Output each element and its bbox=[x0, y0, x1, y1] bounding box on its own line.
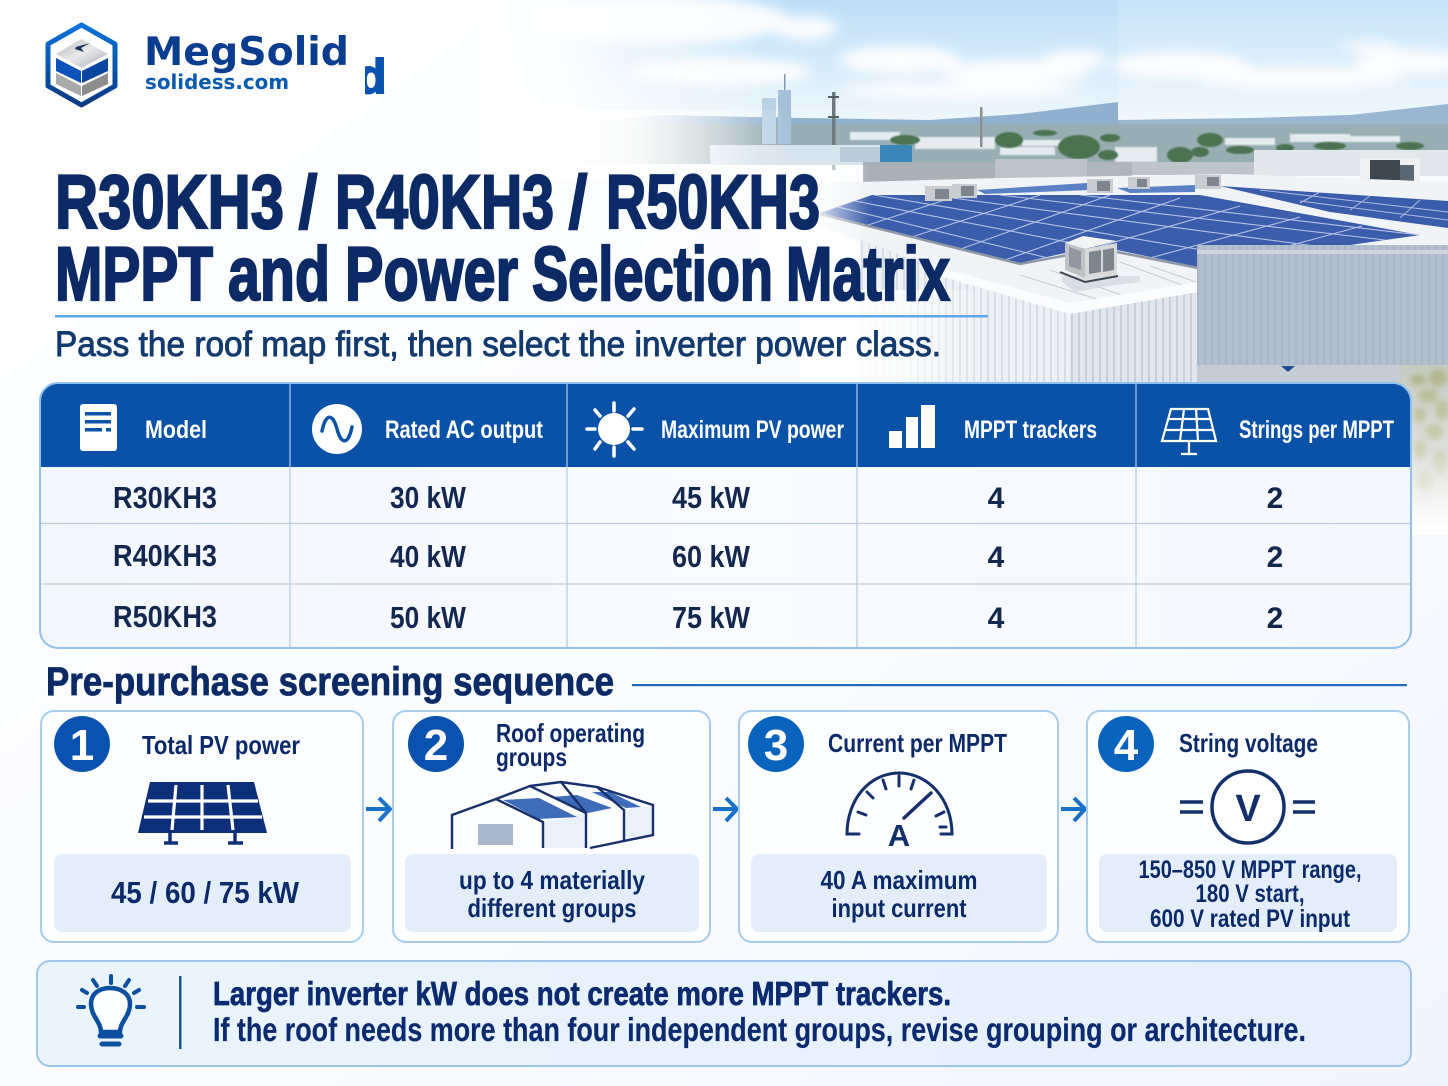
row: R40KH3: 4 bbox=[988, 541, 1005, 574]
card heading bbox=[496, 718, 645, 772]
row: R30KH3: 4 bbox=[988, 482, 1005, 515]
clipped letter remnant: d bbox=[357, 51, 386, 104]
roof units bbox=[925, 175, 1221, 201]
row: R40KH3: R40KH3 bbox=[113, 538, 217, 573]
icon: voltmeter: V bbox=[1235, 788, 1261, 830]
card heading: String voltage bbox=[1179, 728, 1318, 758]
header: Maximum PV power: Maximum PV power bbox=[661, 416, 844, 444]
row: R50KH3: 4 bbox=[988, 602, 1005, 635]
step badge 1 bbox=[54, 716, 110, 772]
header: Rated AC output: Rated AC output bbox=[385, 416, 544, 444]
specification table bbox=[40, 383, 1411, 648]
icon: ammeter gauge: A bbox=[888, 818, 910, 853]
value panel bbox=[54, 854, 351, 932]
card 4: string voltage bbox=[1087, 711, 1409, 942]
background photo: rooftop solar site bbox=[480, 0, 1448, 535]
value panel: 150–850 V MPPT range, bbox=[1138, 856, 1362, 884]
icon: light bulb bbox=[78, 976, 144, 1044]
value panel: 180 V start, bbox=[1196, 880, 1304, 908]
value panel bbox=[751, 854, 1047, 932]
header: MPPT trackers: MPPT trackers bbox=[964, 416, 1097, 444]
icon: voltmeter bbox=[1180, 771, 1315, 843]
row: R30KH3: 2 bbox=[1267, 482, 1283, 515]
row: R50KH3: 2 bbox=[1267, 602, 1283, 635]
row: R30KH3: R30KH3 bbox=[113, 480, 217, 515]
step badge 1: 1 bbox=[70, 721, 94, 770]
callout bbox=[37, 961, 1411, 1066]
card 2: roof operating groups bbox=[393, 711, 710, 942]
row: R30KH3: 30 kW bbox=[390, 480, 467, 515]
icon: AC sine bbox=[312, 404, 362, 454]
title: / bbox=[298, 160, 318, 245]
step badge 4: 4 bbox=[1114, 721, 1139, 770]
value panel: 40 A maximum bbox=[820, 865, 978, 895]
callout text: Larger inverter kW does not create more MPPT trackers. bbox=[213, 975, 951, 1012]
header: Model: Model bbox=[145, 416, 207, 444]
title: R40KH3 bbox=[335, 160, 554, 245]
row: R50KH3: R50KH3 bbox=[113, 599, 217, 634]
row: R40KH3: 2 bbox=[1267, 541, 1283, 574]
icon: hexagon cube mark bbox=[48, 25, 115, 105]
icon: sun bbox=[587, 403, 642, 456]
card heading: Current per MPPT bbox=[828, 728, 1007, 758]
title rule bbox=[55, 315, 988, 318]
website: solidess.com bbox=[145, 70, 289, 94]
arrow 3 bbox=[1061, 798, 1085, 821]
icon: solar panel bbox=[1162, 409, 1216, 454]
title: Matrix bbox=[786, 232, 950, 317]
icon: roof groups bbox=[452, 782, 653, 849]
row: R40KH3: 40 kW bbox=[390, 539, 467, 574]
value panel: input current bbox=[832, 893, 967, 923]
divider bbox=[179, 976, 182, 1049]
table header bbox=[40, 383, 1411, 467]
value panel: 600 V rated PV input bbox=[1150, 905, 1351, 933]
card heading: Total PV power bbox=[142, 730, 300, 760]
card 3: current per MPPT bbox=[739, 711, 1058, 942]
trees at right edge bbox=[1400, 365, 1448, 535]
step badge 3: 3 bbox=[764, 721, 788, 770]
section heading: Pre-purchase screening sequence bbox=[46, 660, 614, 704]
row: R50KH3 bbox=[113, 599, 1283, 635]
value panel: up to 4 materially bbox=[459, 865, 645, 895]
brand name: MegSolid bbox=[144, 30, 349, 75]
row: R40KH3: 60 kW bbox=[672, 539, 751, 574]
row: R40KH3 bbox=[113, 538, 1283, 574]
icon: solar panel bbox=[138, 782, 267, 843]
title: Power bbox=[345, 232, 518, 317]
arrow 2 bbox=[713, 798, 737, 821]
row: R50KH3: 50 kW bbox=[390, 600, 467, 635]
header: Strings per MPPT: Strings per MPPT bbox=[1239, 416, 1394, 444]
value panel bbox=[405, 854, 699, 932]
subtitle: Pass the roof map first, then select the inverter power class. bbox=[55, 325, 941, 364]
title: and bbox=[228, 232, 330, 317]
card heading: Roof operating bbox=[496, 718, 645, 748]
arrow 1 bbox=[366, 798, 390, 821]
step badge 2 bbox=[408, 716, 464, 772]
title: MPPT bbox=[55, 232, 213, 317]
card 1: total PV power bbox=[41, 711, 363, 942]
value panel: 45 / 60 / 75 kW bbox=[111, 875, 300, 910]
value panel: different groups bbox=[468, 893, 636, 923]
title bbox=[55, 160, 950, 317]
title: Selection bbox=[532, 232, 773, 317]
title: / bbox=[568, 160, 588, 245]
row: R30KH3 bbox=[113, 480, 1283, 515]
step badge 3 bbox=[748, 716, 804, 772]
large roof unit bbox=[1060, 236, 1140, 292]
card heading: groups bbox=[496, 742, 567, 772]
callout text bbox=[213, 975, 1306, 1048]
icon: bars bbox=[889, 405, 935, 448]
row: R50KH3: 75 kW bbox=[672, 600, 751, 635]
step badge 4 bbox=[1098, 716, 1154, 772]
row: R30KH3: 45 kW bbox=[672, 480, 751, 515]
logo bbox=[48, 25, 386, 105]
title: R50KH3 bbox=[606, 160, 820, 245]
icon: ammeter gauge bbox=[847, 773, 952, 853]
icon: document bbox=[80, 404, 117, 451]
title: R30KH3 bbox=[55, 160, 284, 245]
step badge 2: 2 bbox=[424, 721, 448, 770]
value panel bbox=[1099, 854, 1397, 933]
